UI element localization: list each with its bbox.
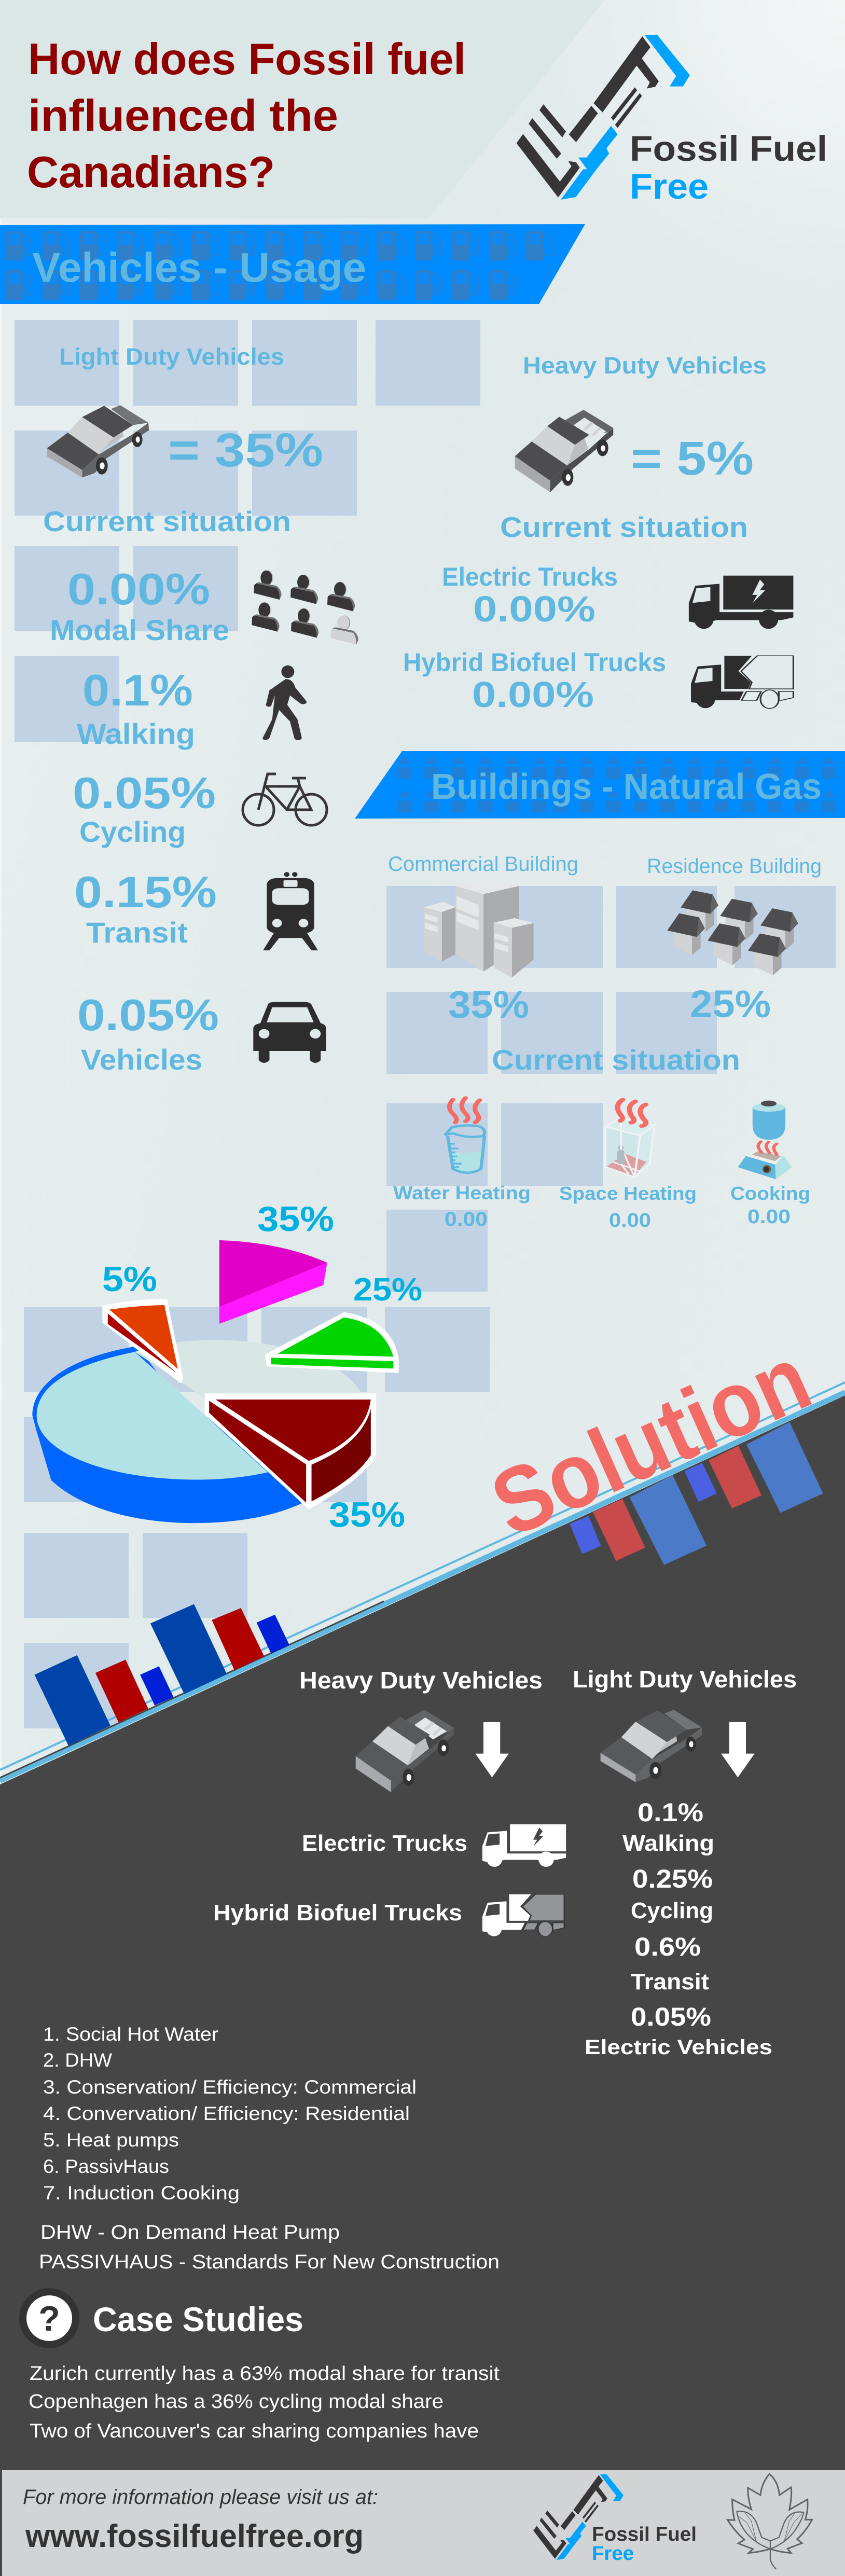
chart: exploded 3D pie: 35%: [329, 1495, 405, 1534]
stats: light duty targets: Electric Vehicles: [585, 2036, 772, 2059]
label: water heating: Water Heating: [393, 1182, 531, 1203]
list: solutions: 1. Social Hot Water: [43, 2024, 218, 2045]
list: solutions: [43, 2024, 417, 2204]
title: influenced the: [28, 91, 338, 141]
section banner: Vehicles - Usage: Vehicles - Usage: [32, 244, 366, 290]
heading: Heavy Duty Vehicles: Heavy Duty Vehicles: [523, 352, 767, 379]
icon: hybrid truck: [691, 656, 793, 709]
stat: vehicles: Vehicles: [81, 1043, 202, 1076]
arrow: heavy duty down: [475, 1722, 509, 1778]
icon: question mark: ?: [38, 2299, 60, 2338]
icon: people: [252, 571, 358, 645]
icon: space heating house: [605, 1100, 655, 1177]
icon: hybrid truck white: [482, 1894, 564, 1936]
section banner: Buildings - Natural Gas: [355, 751, 845, 819]
subheading: current situation buildings: Current situation: [492, 1044, 740, 1076]
icon: cooking stove: [738, 1101, 792, 1179]
arrow: light duty down: [721, 1722, 755, 1778]
stats: light duty targets: Walking: [622, 1831, 714, 1856]
list: solutions: 6. PassivHaus: [43, 2156, 169, 2177]
stat: cycling: Cycling: [79, 815, 186, 848]
pie body: [32, 1346, 302, 1523]
pie main slice: [37, 1352, 268, 1480]
label: space heating: Space Heating: [559, 1183, 697, 1204]
stat: light duty 35%: = 35%: [168, 424, 323, 477]
stat: walking: Walking: [77, 717, 195, 750]
stat: transit: 0.15%: [74, 868, 217, 917]
heading: Commercial Building: Commercial Building: [388, 853, 578, 876]
label: water heating: 0.00: [445, 1209, 488, 1230]
icon: heavy duty pickup: [515, 410, 613, 492]
label: cooking: [730, 1183, 810, 1228]
chart: exploded 3D pie: [32, 1199, 422, 1534]
heading: Light Duty Vehicles solution: Light Duty Vehicles: [573, 1666, 797, 1693]
text: more information: For more information please visit us at:: [23, 2486, 378, 2509]
subheading: current situation left: Current situation: [43, 505, 291, 537]
heading: Residence Building: Residence Building: [647, 855, 822, 878]
stats: light duty targets: Transit: [631, 1969, 709, 1995]
accent line: thin diagonal: [0, 1382, 845, 1770]
text: case studies: [29, 2363, 500, 2442]
icon: light duty car: [47, 405, 149, 478]
text: hybrid biofuel trucks: Hybrid Biofuel Trucks: [403, 648, 666, 677]
stat: modal share: 0.00%: [67, 565, 210, 614]
icon: train: [263, 872, 318, 950]
stats: light duty targets: [585, 1798, 772, 2059]
heading: Light Duty Vehicles: Light Duty Vehicles: [59, 343, 284, 370]
notes: definitions: [39, 2222, 500, 2273]
logo: Fossil Fuel Free: [517, 35, 827, 206]
pie slice: maroon: [205, 1393, 376, 1509]
label: Electric Trucks solution: Electric Trucks: [302, 1831, 467, 1856]
chart: exploded 3D pie: 35%: [257, 1199, 334, 1239]
notes: definitions: PASSIVHAUS - Standards For New Construction: [39, 2251, 500, 2273]
bars: muted group on dark: [570, 1422, 823, 1565]
heading: Heavy Duty Vehicles solution: Heavy Duty Vehicles: [299, 1667, 543, 1694]
label: water heating: [393, 1182, 531, 1230]
icon: pickup on dark: [356, 1710, 454, 1792]
icon: walking person: [263, 666, 307, 740]
stat: transit: [74, 868, 217, 949]
list: solutions: 5. Heat pumps: [43, 2129, 179, 2151]
stats: light duty targets: 0.05%: [631, 2002, 711, 2031]
stat: walking: 0.1%: [82, 666, 193, 715]
icon: car on dark: [601, 1710, 702, 1782]
notes: definitions: DHW - On Demand Heat Pump: [40, 2222, 340, 2243]
stats: light duty targets: 0.1%: [638, 1798, 703, 1827]
heading: Solution: Solution: [477, 1326, 825, 1556]
list: solutions: 2. DHW: [43, 2049, 112, 2071]
icon: electric truck: [689, 576, 793, 629]
stat: transit: Transit: [86, 916, 188, 949]
background tile grid: [15, 320, 836, 1728]
text: electric trucks: 0.00%: [473, 589, 595, 629]
logo: footer: Fossil Fuel: [592, 2524, 697, 2545]
label: cooking: Cooking: [730, 1183, 810, 1204]
text: case studies: Zurich currently has a 63% modal share for transit: [30, 2363, 500, 2385]
pie remainder: [135, 1340, 362, 1402]
pie slice: orange: [102, 1299, 183, 1383]
pie slice: magenta: [219, 1240, 327, 1324]
label: Hybrid Biofuel Trucks solution: Hybrid Biofuel Trucks: [213, 1900, 462, 1926]
panel: title background: [0, 0, 605, 218]
text: electric trucks: Electric Trucks: [442, 562, 618, 591]
stat: modal share: Modal Share: [50, 614, 229, 646]
section banner: Vehicles - Usage: [0, 224, 585, 304]
title: How does Fossil fuel: [28, 35, 466, 84]
stat: vehicles: 0.05%: [77, 991, 219, 1040]
title: [27, 35, 466, 197]
logo: footer: [533, 2474, 697, 2565]
logo: Fossil Fuel Free: Free: [630, 167, 709, 206]
text: case studies: Two of Vancouver's car sharing companies have: [30, 2420, 479, 2442]
pie slice: green: [265, 1312, 399, 1373]
stat: cycling: 0.05%: [73, 769, 216, 818]
icon: electric truck white: [482, 1824, 566, 1867]
stats: light duty targets: Cycling: [631, 1898, 713, 1923]
stats: light duty targets: 0.25%: [632, 1864, 713, 1893]
icon: water heating cup: [445, 1098, 484, 1173]
stat: commercial 35%: 35%: [448, 983, 529, 1026]
subheading: current situation right: Current situation: [500, 511, 748, 543]
stat: heavy duty 5%: = 5%: [631, 432, 754, 485]
stat: vehicles: [77, 991, 219, 1076]
icon: car front: [253, 1002, 326, 1063]
logo: footer: Free: [592, 2543, 634, 2565]
stat: residence 25%: 25%: [690, 982, 771, 1026]
accent line: thick diagonal: [0, 1392, 845, 1781]
list: solutions: 7. Induction Cooking: [43, 2182, 240, 2204]
title: Canadians?: [27, 148, 275, 197]
icon: residential houses: [667, 890, 798, 975]
list: solutions: 4. Convervation/ Efficiency: Residential: [43, 2103, 410, 2124]
icon: maple leaf: [727, 2474, 812, 2569]
text: hybrid biofuel trucks: 0.00%: [472, 674, 594, 715]
panel: footer: [2, 2470, 845, 2576]
stat: cycling: [73, 769, 216, 848]
chart: exploded 3D pie: 25%: [353, 1272, 422, 1308]
stat: walking: [77, 666, 195, 750]
label: cooking: 0.00: [747, 1206, 791, 1228]
stats: light duty targets: 0.6%: [634, 1932, 701, 1961]
icon: commercial buildings: [424, 878, 534, 977]
link text: website: www.fossilfuelfree.org: [25, 2518, 364, 2554]
icon: question mark: [19, 2288, 79, 2348]
logo: Fossil Fuel Free: Fossil Fuel: [630, 129, 827, 169]
text: hybrid biofuel trucks: [403, 648, 666, 715]
label: space heating: 0.00: [609, 1210, 651, 1231]
chart: exploded 3D pie: 5%: [102, 1259, 157, 1299]
section banner: Buildings - Natural Gas: Buildings - Natural Gas: [431, 766, 822, 807]
stat: modal share: [50, 565, 229, 646]
bars: bright group: [34, 1604, 289, 1746]
list: solutions: 3. Conservation/ Efficiency: Commercial: [43, 2076, 417, 2098]
text: case studies: Copenhagen has a 36% cycling modal share: [29, 2391, 444, 2413]
text: electric trucks: [442, 562, 618, 629]
label: space heating: [559, 1183, 697, 1231]
heading: Case Studies: Case Studies: [93, 2300, 303, 2338]
icon: bicycle: [243, 774, 327, 825]
panel: dark solution area: [0, 1395, 845, 2576]
